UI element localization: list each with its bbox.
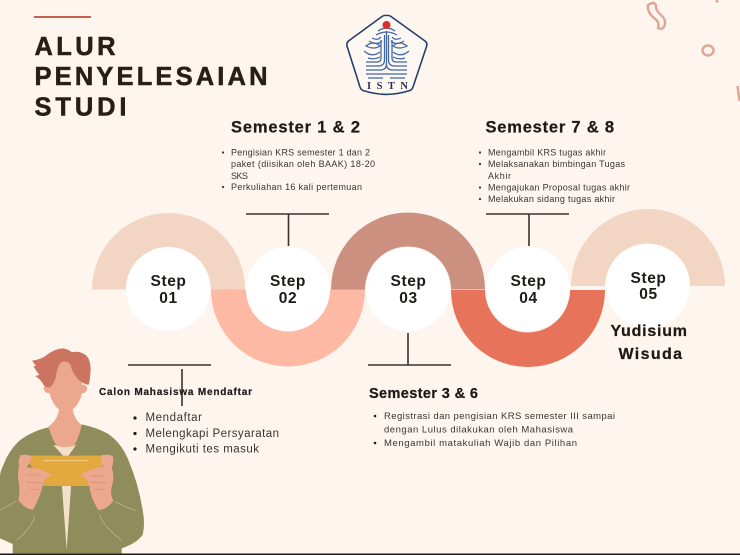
decorative squiggles: [648, 0, 740, 101]
left hand: [18, 455, 52, 509]
step 4 circle: Step: [510, 273, 546, 290]
connector: step 1: [128, 365, 211, 406]
step 3 circle: [366, 247, 450, 331]
text block: calon mahasiswa: Mendaftar: [146, 412, 202, 424]
shirt: [53, 445, 76, 550]
step 4 circle: 04: [519, 290, 538, 307]
step 3 circle: Step: [390, 273, 426, 290]
arc: step 1: [92, 213, 245, 290]
step 4 circle: [486, 247, 570, 331]
text block: calon mahasiswa: [99, 387, 279, 456]
arc: step 2: [211, 290, 365, 366]
text block: semester 7 and 8: Melakukan sidang tugas akhir: [488, 194, 615, 204]
text block: semester 1 and 2: Pengisian KRS semester 1 dan 2: [231, 148, 370, 158]
step 2 circle: 02: [279, 290, 297, 307]
connector: step 3: [368, 333, 451, 365]
text block: semester 3 and 6: dengan Lulus dilakukan oleh Mahasiswa: [384, 424, 574, 436]
text block: semester 1 and 2: paket (diisikan oleh BAAK) 18-20: [231, 159, 375, 169]
right hand: [80, 455, 113, 510]
decorative accent line: [34, 16, 91, 18]
phone: [26, 456, 104, 486]
step 1 circle: 01: [159, 290, 178, 307]
jacket: [0, 424, 144, 553]
connector: step 4: [486, 214, 569, 246]
text block: semester 1 and 2: Perkuliahan 16 kali pertemuan: [231, 182, 362, 192]
title: STUDI: [34, 94, 126, 122]
step 1 circle: [126, 247, 210, 331]
connector: step 2: [246, 214, 329, 246]
hair: [32, 348, 91, 387]
illustration: person holding phone: [0, 348, 144, 553]
icon: ISTN logo: [347, 15, 427, 94]
text block: yudisium wisuda: [610, 323, 687, 363]
text block: semester 7 and 8: Mengajukan Proposal tugas akhir: [488, 182, 630, 192]
text block: semester 3 and 6: Mengambil matakuliah Wajib dan Pilihan: [384, 438, 577, 449]
chart: serpentine step path: [92, 209, 725, 367]
title: [34, 33, 268, 122]
text block: semester 7 and 8: Mengambil KRS tugas akhir: [488, 148, 606, 158]
text block: semester 7 and 8: Semester 7 & 8: [486, 118, 614, 136]
text block: yudisium wisuda: Yudisium: [610, 323, 687, 340]
arc: step 4: [451, 290, 605, 367]
text block: semester 3 and 6: Registrasi dan pengisian KRS semester III sampai: [384, 411, 615, 422]
step 5 circle: [606, 244, 690, 328]
text block: semester 7 and 8: Akhir: [488, 171, 511, 181]
step 2 circle: Step: [270, 273, 306, 290]
text block: semester 7 and 8: Melaksanakan bimbingan Tugas: [488, 159, 626, 169]
text block: semester 1 and 2: SKS: [231, 171, 248, 181]
step 5 circle: 05: [639, 286, 658, 303]
text block: calon mahasiswa: Mengikuti tes masuk: [146, 444, 259, 456]
step 2 circle: [246, 247, 330, 331]
icon: ISTN logo: ISTN: [367, 81, 408, 92]
face: [49, 357, 82, 411]
text block: calon mahasiswa: Calon Mahasiswa Mendaftar: [99, 387, 252, 398]
text block: calon mahasiswa: Melengkapi Persyaratan: [146, 428, 279, 440]
step 1 circle: Step: [150, 273, 186, 290]
text block: yudisium wisuda: Wisuda: [618, 346, 682, 363]
bottom edge strip: [0, 554, 740, 555]
text block: semester 3 and 6: Semester 3 & 6: [369, 386, 478, 402]
text block: semester 1 and 2: Semester 1 & 2: [231, 118, 360, 136]
ears: [43, 385, 87, 393]
arc: step 5: [571, 209, 725, 286]
neck: [48, 403, 82, 447]
text block: semester 1 and 2: [222, 118, 375, 192]
step 5 circle: Step: [630, 270, 666, 287]
title: PENYELESAIAN: [34, 63, 268, 91]
step 3 circle: 03: [399, 290, 418, 307]
title: ALUR: [34, 33, 116, 61]
text block: semester 3 and 6: [369, 386, 615, 449]
arc: step 3: [331, 212, 485, 290]
text block: semester 7 and 8: [479, 118, 630, 204]
